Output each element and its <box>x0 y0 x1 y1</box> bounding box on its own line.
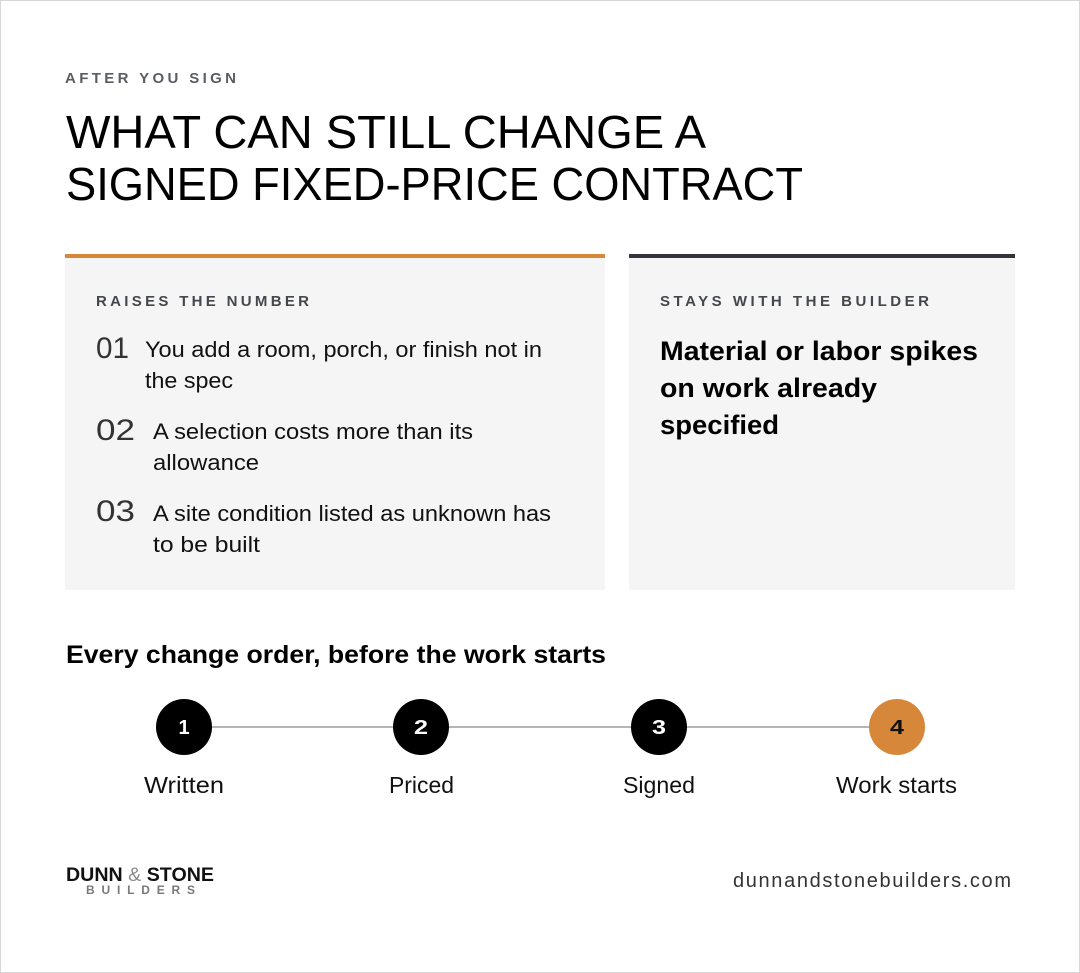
item 03: A site condition listed as unknown has <box>153 501 551 526</box>
step 1 <box>144 699 224 798</box>
item 02: 02 <box>96 414 135 447</box>
item 01: the spec <box>145 368 233 393</box>
step 3 <box>623 699 695 798</box>
item 01 <box>96 332 542 393</box>
panel: raises the number <box>65 254 605 590</box>
title: WHAT CAN STILL CHANGE A <box>66 106 706 158</box>
item 01: 01 <box>96 332 129 365</box>
step 2: 2 <box>414 717 428 739</box>
item 03: 03 <box>96 495 135 528</box>
step 1: Written <box>144 772 224 798</box>
panel: stays with the builder <box>629 254 1015 590</box>
panel label: raises the number: RAISES THE NUMBER <box>96 293 309 310</box>
step 2: Priced <box>389 772 454 798</box>
process heading: Every change order, before the work starts <box>66 641 606 669</box>
title: SIGNED FIXED-PRICE CONTRACT <box>66 158 803 210</box>
builder statement <box>660 336 978 440</box>
item 03 <box>96 495 551 557</box>
title <box>66 106 803 210</box>
builder statement: specified <box>660 410 779 440</box>
step 3: Signed <box>623 772 695 798</box>
eyebrow: AFTER YOU SIGN <box>65 70 236 87</box>
item 03: to be built <box>153 532 260 557</box>
step 2 <box>389 699 454 798</box>
item 01: You add a room, porch, or finish not in <box>145 337 542 362</box>
builder statement: Material or labor spikes <box>660 336 978 366</box>
step 4: Work starts <box>836 772 957 798</box>
item 02 <box>96 414 473 475</box>
website: dunnandstonebuilders.com <box>733 870 1011 892</box>
step 4: 4 <box>890 717 905 739</box>
item 02: allowance <box>153 450 259 475</box>
logo <box>66 865 214 897</box>
step 1: 1 <box>178 717 190 739</box>
logo: DUNN & STONE <box>66 865 214 886</box>
step 3: 3 <box>652 717 666 739</box>
process timeline <box>144 699 957 798</box>
builder statement: on work already <box>660 373 877 403</box>
panel label: stays with the builder: STAYS WITH THE BUILDER <box>660 293 929 310</box>
logo: BUILDERS <box>86 883 195 897</box>
item 02: A selection costs more than its <box>153 419 473 444</box>
step 4 <box>836 699 957 798</box>
